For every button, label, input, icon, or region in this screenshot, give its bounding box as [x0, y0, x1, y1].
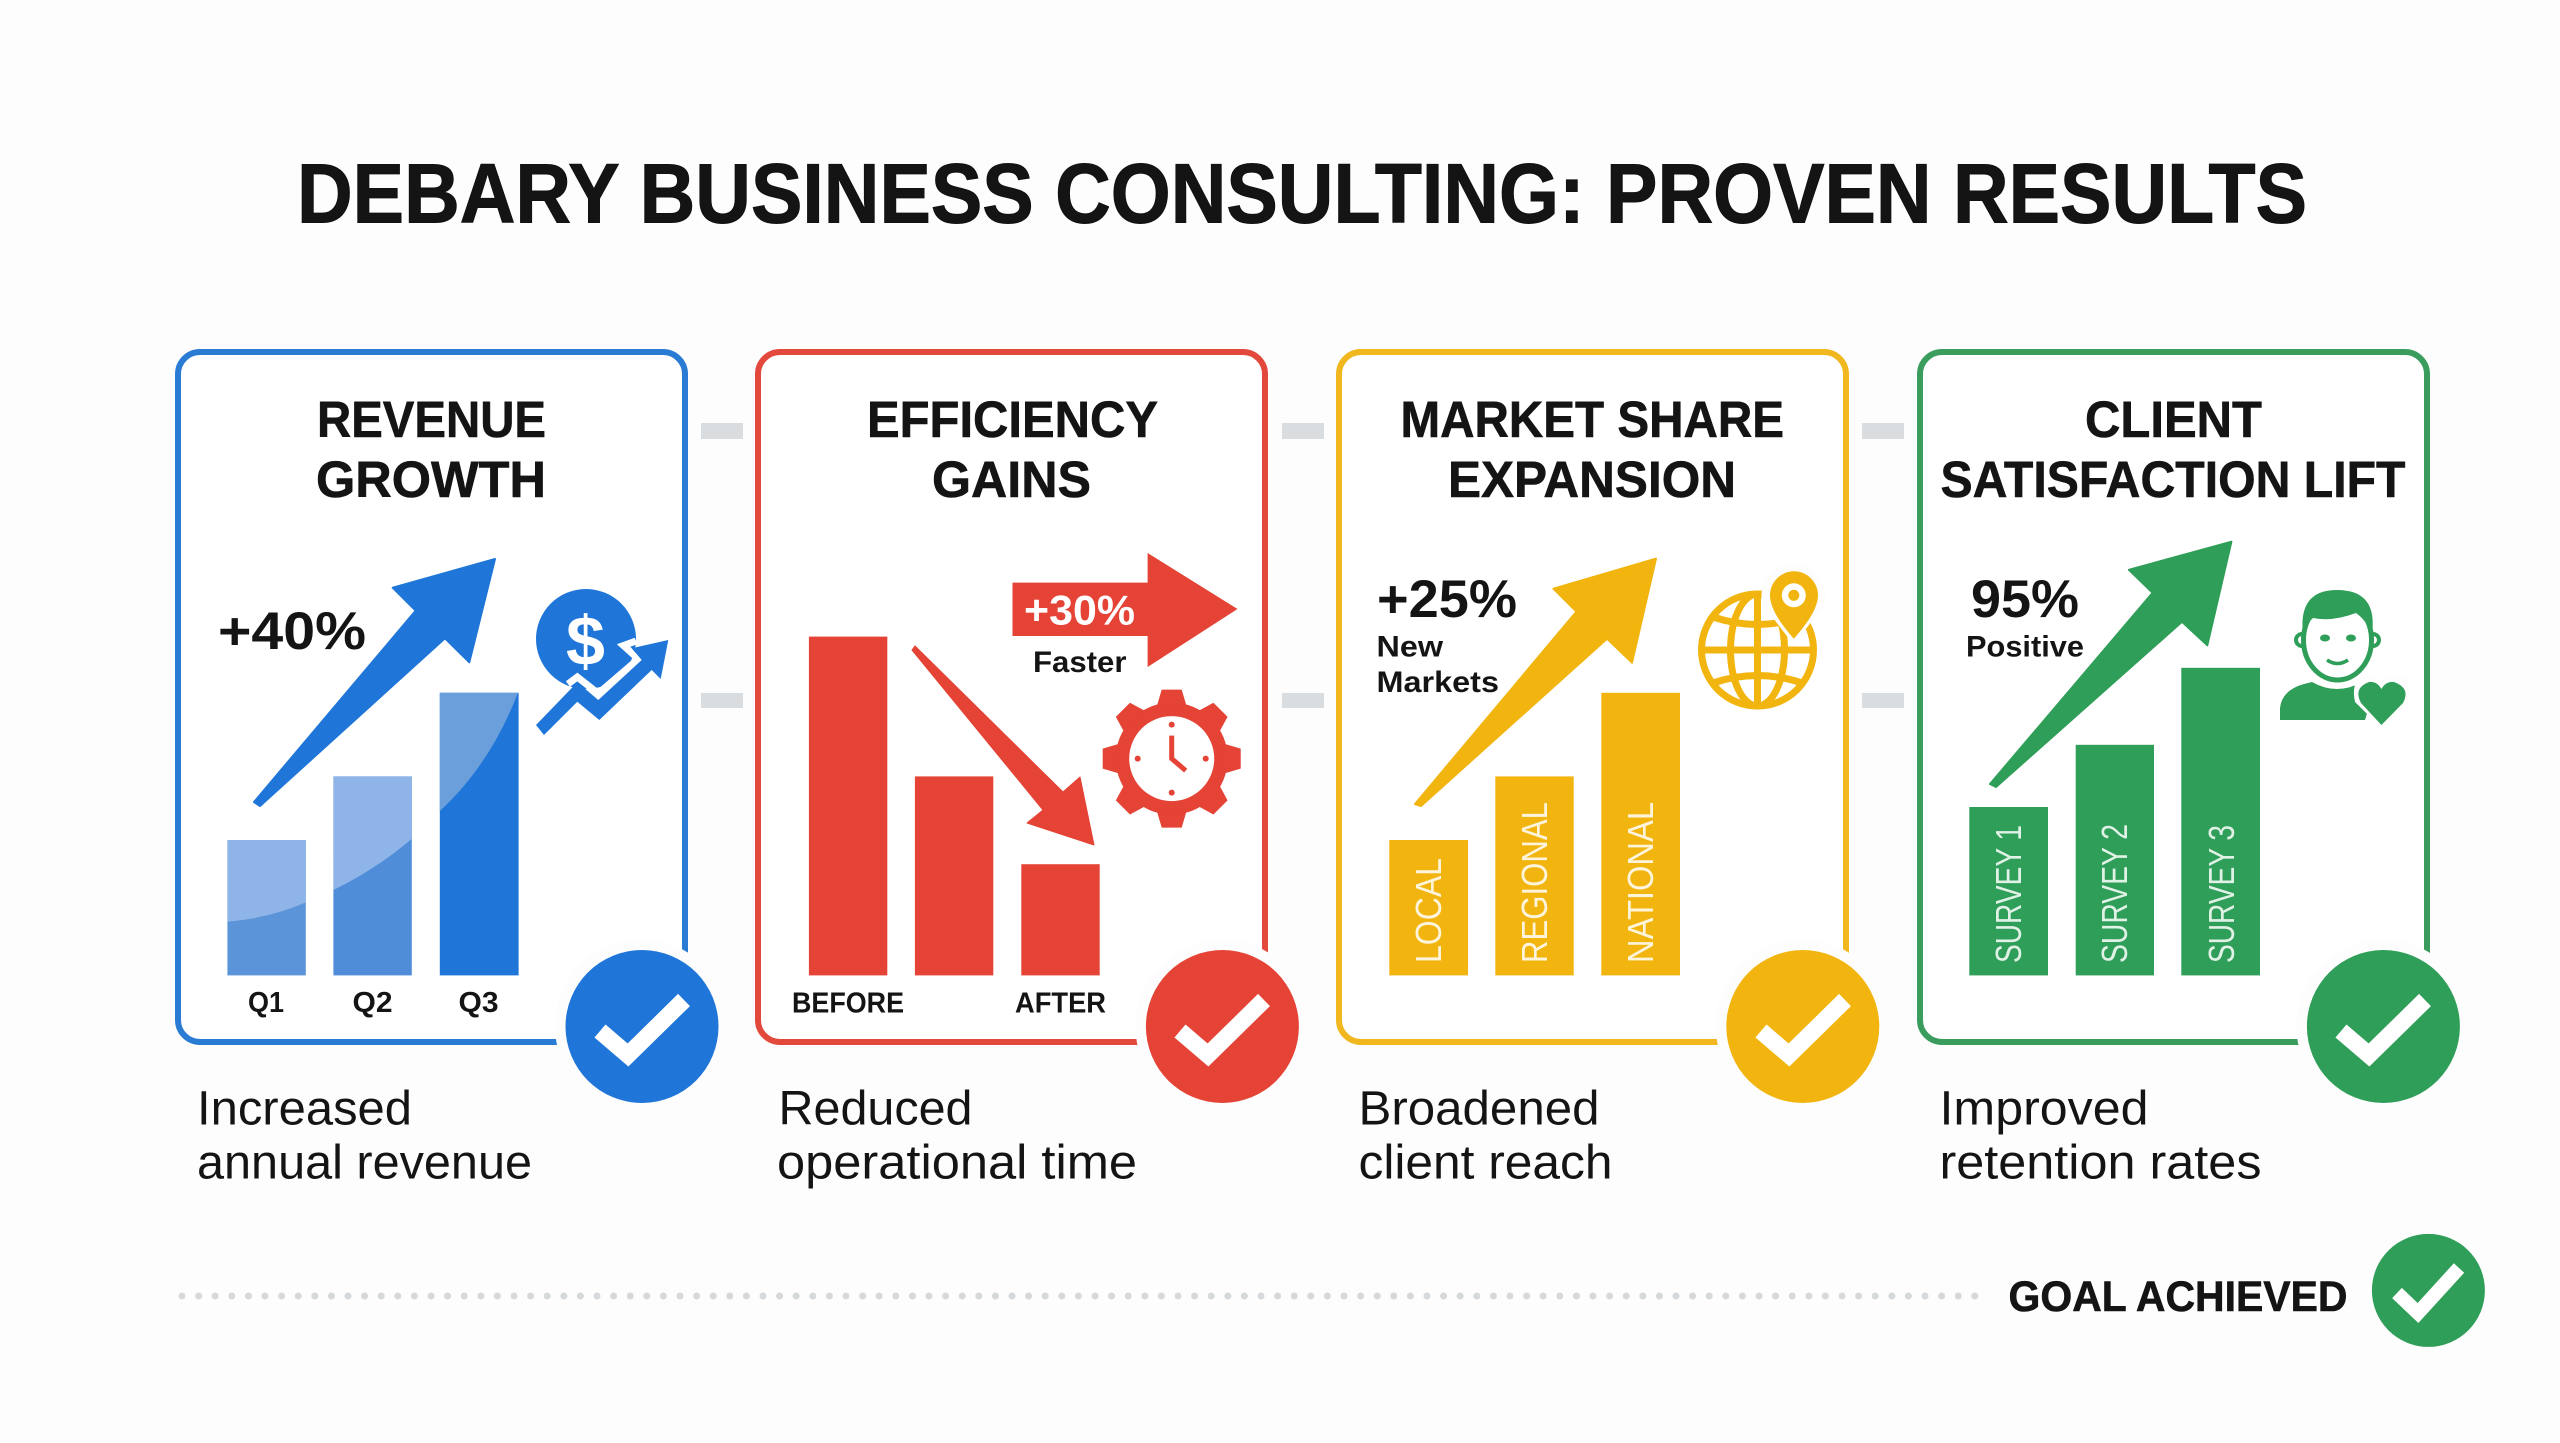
badge: check [2296, 940, 2470, 1114]
icon: gear clock [1103, 690, 1241, 828]
card frame [178, 352, 685, 1042]
title: DEBARY BUSINESS CONSULTING: PROVEN RESULTS [297, 146, 2307, 240]
panel: revenue growth [178, 352, 729, 1190]
description [777, 1082, 1137, 1190]
arrow: down [912, 646, 1094, 845]
bar chart: AFTER [1015, 988, 1106, 1020]
bar chart: SURVEY 3 [2201, 825, 2242, 963]
heading [316, 391, 546, 508]
growth arrow [1990, 542, 2231, 787]
heading: GROWTH [316, 451, 546, 508]
bar chart [792, 637, 1106, 1020]
card frame [1920, 352, 2427, 1042]
icon: dollar with trend arrow [536, 589, 668, 735]
bar chart [227, 693, 519, 1019]
bar chart: SURVEY 2 [2094, 824, 2135, 963]
badge: check [1135, 940, 1309, 1114]
heading [867, 391, 1158, 508]
heading: REVENUE [317, 391, 546, 448]
callout: +30% faster: Faster [1033, 646, 1127, 679]
panel: efficiency gains [758, 352, 1309, 1190]
bar chart: Q2 [352, 987, 392, 1019]
bar chart: SURVEY 1 [1988, 825, 2029, 963]
stat: 95% positive: 95% [1971, 570, 2079, 629]
heading [1400, 391, 1784, 508]
bar chart: Q3 [458, 987, 498, 1019]
stat: +25% new markets: +25% [1377, 570, 1517, 629]
footer: goal achieved [2008, 1234, 2485, 1347]
badge: check [1716, 940, 1890, 1114]
icon: footer check [2372, 1234, 2485, 1347]
description: Reduced [778, 1082, 972, 1136]
description [197, 1082, 532, 1190]
growth arrow [1415, 559, 1656, 806]
bar chart: Q1 [248, 987, 284, 1019]
stat: 95% positive: Positive [1966, 630, 2084, 664]
heading [1940, 391, 2406, 508]
connectors between cards [701, 423, 1904, 708]
description [1940, 1082, 2262, 1190]
callout: +30% faster: +30% [1024, 586, 1135, 633]
heading: EFFICIENCY [867, 391, 1158, 448]
bar chart: NATIONAL [1620, 802, 1661, 963]
heading: EXPANSION [1448, 451, 1736, 508]
panel: client satisfaction lift [1920, 352, 2470, 1190]
callout: +30% faster [1012, 553, 1238, 679]
description: Improved [1940, 1082, 2148, 1136]
card frame [1339, 352, 1846, 1042]
icon: dollar with trend arrow: $ [566, 602, 605, 680]
bar chart [1969, 668, 2260, 975]
heading: MARKET SHARE [1400, 391, 1784, 448]
heading: CLIENT [2085, 391, 2262, 448]
heading: SATISFACTION LIFT [1940, 451, 2406, 508]
panel: market share expansion [1339, 352, 1890, 1190]
growth arrow [254, 559, 495, 806]
description: annual revenue [197, 1136, 532, 1190]
bar chart: BEFORE [792, 988, 904, 1020]
card frame [758, 352, 1265, 1042]
badge: check [555, 940, 729, 1114]
stat: +40%: +40% [218, 602, 366, 661]
description: Increased [197, 1082, 412, 1136]
description: client reach [1358, 1136, 1612, 1190]
stat: 95% positive [1966, 570, 2084, 664]
stat: +25% new markets [1376, 570, 1517, 699]
bar chart: REGIONAL [1514, 802, 1555, 963]
icon: globe with pin [1702, 563, 1826, 706]
icon: person with heart [2280, 590, 2410, 728]
heading: GAINS [932, 451, 1091, 508]
description: Broadened [1358, 1082, 1600, 1136]
bar chart: LOCAL [1408, 858, 1449, 963]
description: operational time [777, 1136, 1137, 1190]
stat: +25% new markets: Markets [1376, 666, 1499, 699]
footer label: GOAL ACHIEVED [2008, 1273, 2348, 1321]
description [1358, 1082, 1612, 1190]
stat: +25% new markets: New [1376, 630, 1444, 664]
bar chart [1389, 693, 1680, 975]
description: retention rates [1940, 1136, 2262, 1190]
